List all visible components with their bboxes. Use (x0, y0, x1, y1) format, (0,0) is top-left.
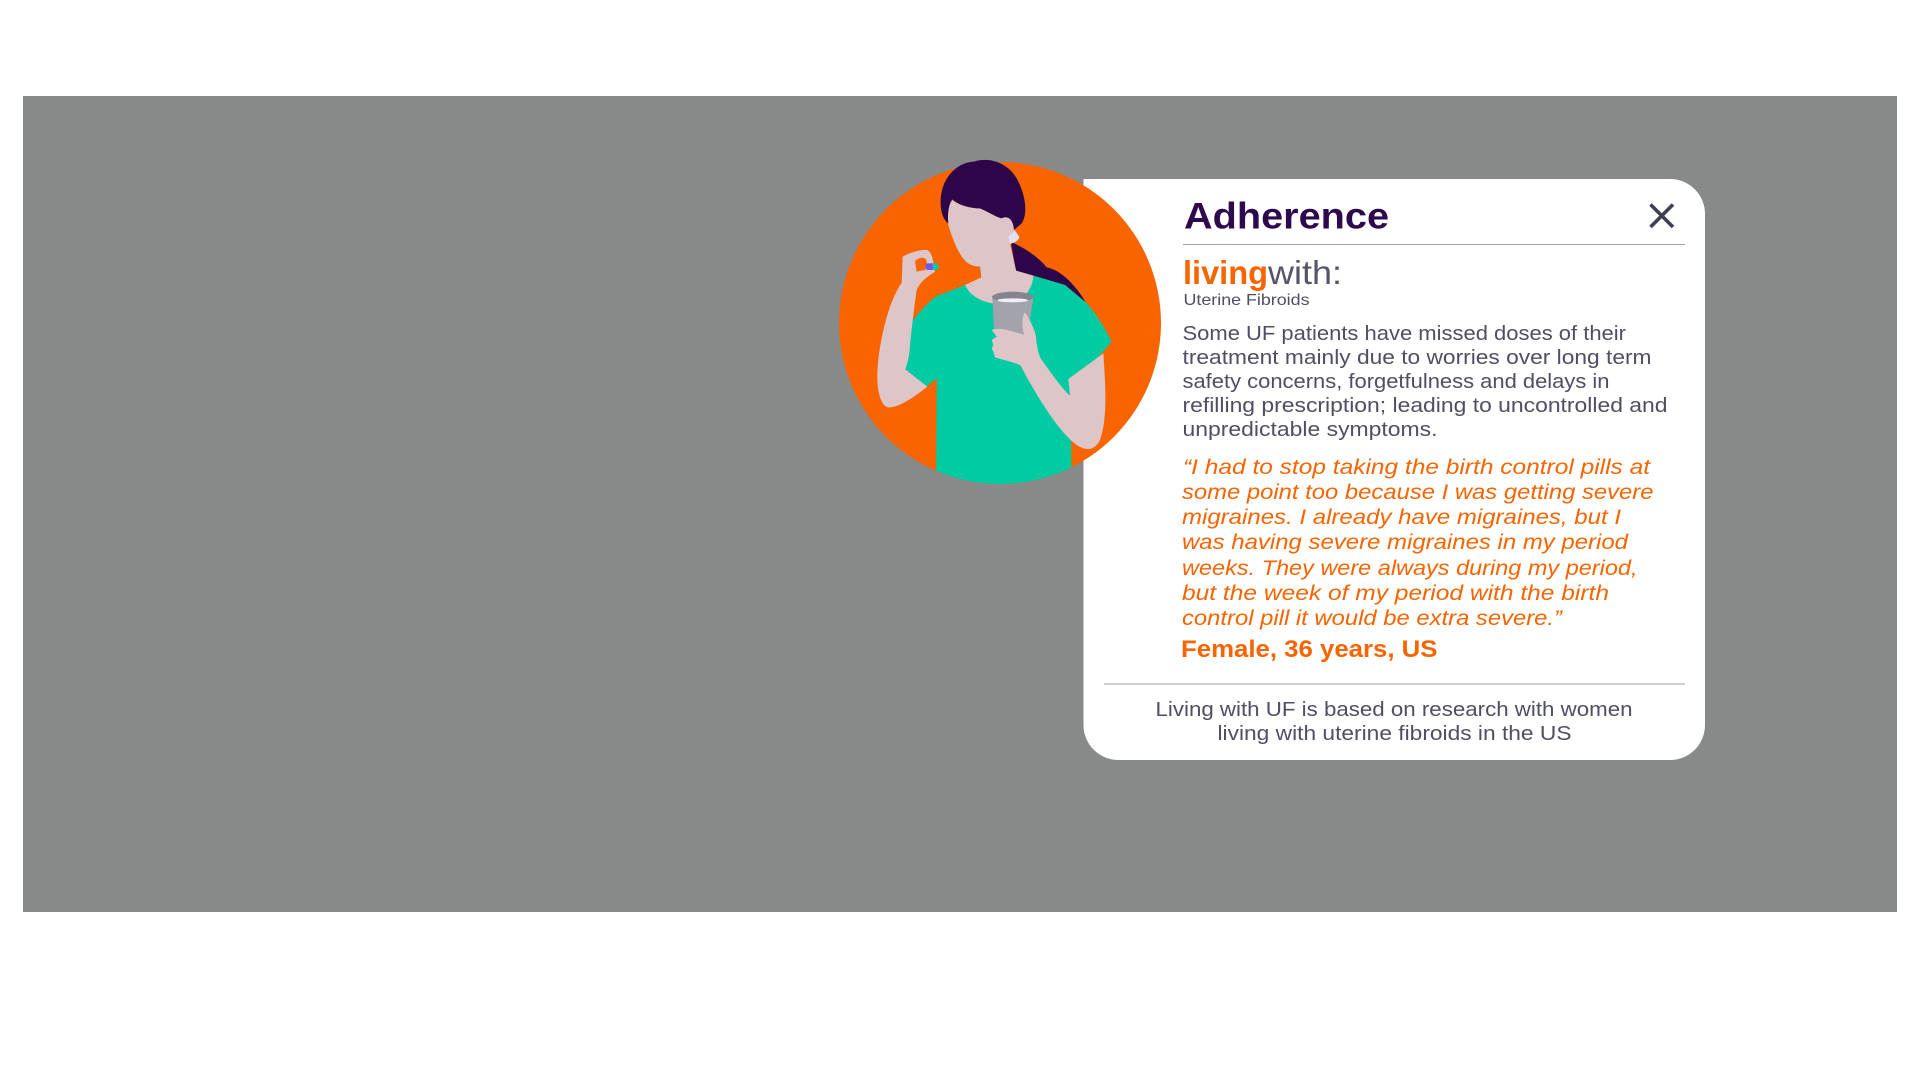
quote attribution: Female, 36 years, US (1181, 636, 1438, 663)
ponytail (1011, 242, 1086, 302)
patient quote: some point too because I was getting severe (1182, 481, 1654, 504)
footnote (1156, 698, 1632, 745)
patient quote: but the week of my period with the birth (1182, 582, 1609, 605)
patient quote: migraines. I already have migraines, but I (1182, 506, 1621, 529)
text block: description: refilling prescription; leading to uncontrolled and (1182, 394, 1668, 417)
orange circle (839, 162, 1161, 484)
illustration: woman taking a pill (839, 160, 1161, 487)
left arm and hand (877, 250, 935, 407)
icon: close (1650, 204, 1673, 227)
grey backdrop panel (23, 96, 1897, 912)
panel: adherence card (1084, 179, 1705, 760)
heading: Adherence: Adherence (1184, 196, 1389, 236)
subtitle: Uterine Fibroids: Uterine Fibroids (1184, 292, 1310, 309)
cup (992, 292, 1033, 334)
footnote: Living with UF is based on research with women (1156, 698, 1632, 721)
brand: living with: with: (1267, 254, 1342, 291)
text block: description (1182, 322, 1668, 441)
patient quote: control pill it would be extra severe.” (1182, 607, 1563, 630)
footnote: living with uterine fibroids in the US (1218, 722, 1572, 745)
shirt (905, 276, 1112, 487)
right arm and hand (992, 312, 1105, 449)
brand: living with (1183, 254, 1342, 291)
text block: description: unpredictable symptoms. (1182, 418, 1438, 441)
text block: description: treatment mainly due to worries over long term (1182, 346, 1652, 369)
gap between fingers (915, 258, 927, 272)
hair tie (1008, 231, 1019, 244)
face (948, 200, 1016, 271)
hair (941, 160, 1025, 230)
text block: description: safety concerns, forgetfulness and delays in (1182, 370, 1610, 393)
patient quote (1182, 456, 1654, 630)
brand: living with: living (1183, 254, 1268, 291)
patient quote: “I had to stop taking the birth control pills at (1183, 456, 1651, 479)
neck and chest (965, 243, 1033, 307)
text block: description: Some UF patients have missed doses of their (1182, 322, 1626, 345)
patient quote: weeks. They were always during my period, (1182, 557, 1638, 580)
patient quote: was having severe migraines in my period (1182, 531, 1630, 554)
pill (925, 263, 939, 270)
